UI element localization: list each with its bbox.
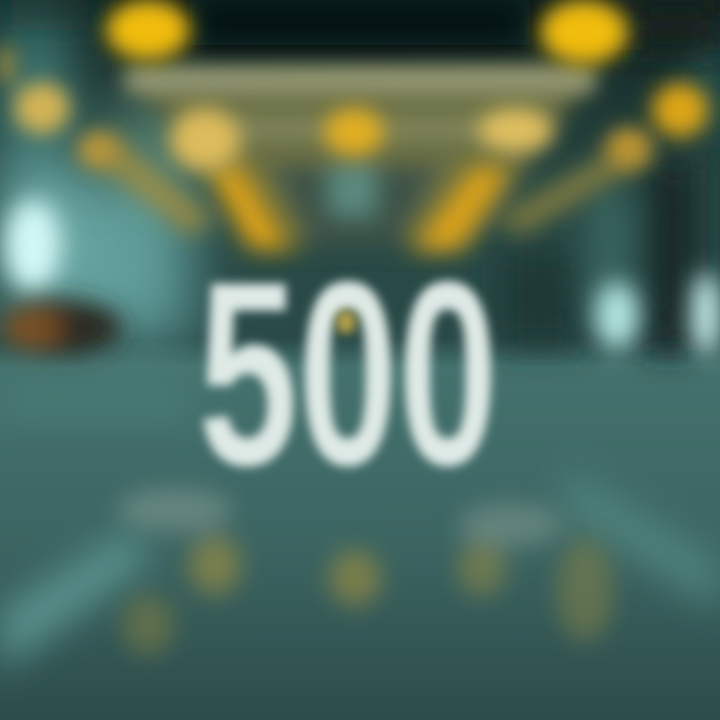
left wall glow bbox=[0, 0, 190, 340]
yellow ceiling lights bbox=[0, 0, 708, 172]
big number 500: 500 bbox=[198, 227, 498, 520]
ceiling light strips bbox=[125, 68, 595, 138]
orange car at left bbox=[2, 300, 122, 356]
white glowing lamps bbox=[5, 199, 720, 356]
yellow beams bbox=[85, 135, 655, 250]
gold glint in middle zero bbox=[336, 310, 356, 334]
ceiling panel: olive trapezoid bbox=[125, 70, 595, 245]
ceiling dark band bbox=[0, 0, 720, 50]
floor light streaks bbox=[0, 380, 720, 670]
right wall shadow bbox=[500, 40, 720, 350]
floor reflections bbox=[117, 488, 613, 655]
